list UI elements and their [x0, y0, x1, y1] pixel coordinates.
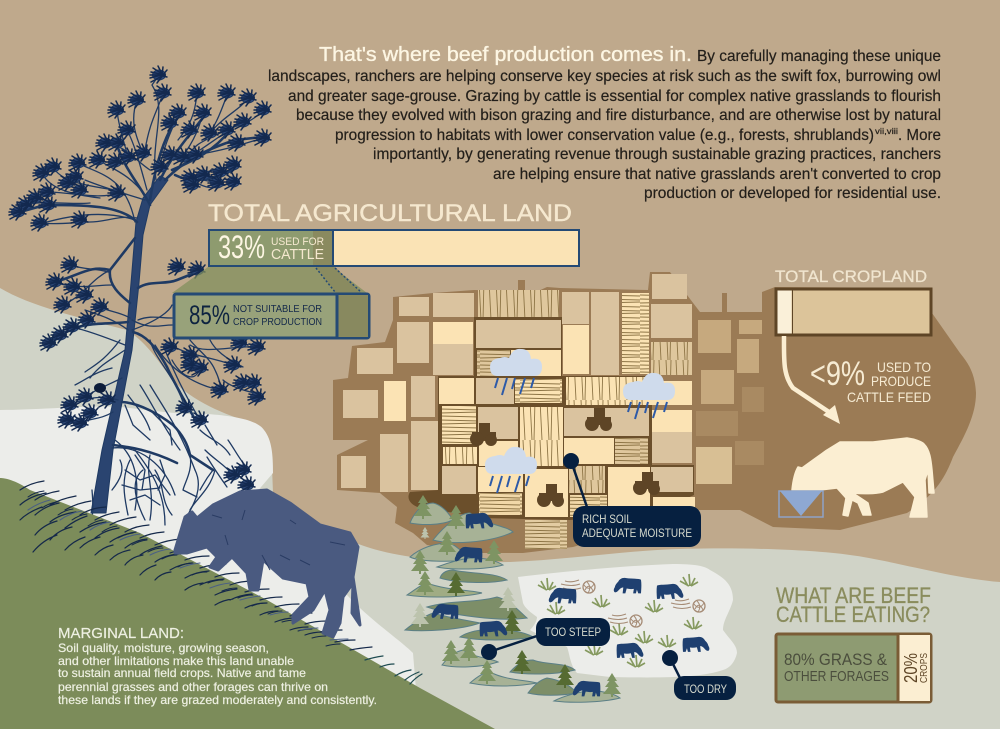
callout: too dry: TOO DRY [684, 682, 727, 696]
bar chart: not suitable for crop production: NOT SUITABLE FOR [233, 304, 322, 315]
icon: cream cow eating [792, 438, 934, 517]
bar chart: not suitable for crop production: 85% [189, 300, 230, 330]
arrow: cropland to cattle feed [784, 336, 840, 424]
bar chart: total cropland [776, 289, 931, 335]
bar chart: cattle diet: 20% [901, 653, 921, 683]
bar chart: cattle diet: OTHER FORAGES [784, 668, 889, 685]
text block: marginal land: these lands if they are grazed moderately and consistently. [58, 693, 377, 707]
text block: marginal land [58, 625, 377, 707]
bar chart: not suitable for crop production: CROP PRODUCTION [233, 317, 322, 328]
heading paragraph: beef production: importantly, by generating revenue through sustainable grazing practices, ranchers [373, 146, 941, 163]
pine tree illustration [9, 66, 271, 530]
chart heading: total agricultural land: TOTAL AGRICULTURAL LAND [208, 200, 572, 227]
stat: under nine percent cattle feed: CATTLE FEED [847, 389, 931, 405]
icons: grass and tumbleweeds [538, 574, 705, 667]
bar chart: total agricultural land: CATTLE [271, 246, 324, 263]
white snow ground [0, 407, 416, 700]
soil shadow [408, 317, 694, 520]
callout: too steep [481, 618, 610, 660]
text block: marginal land: Soil quality, moisture, growing season, [58, 641, 269, 655]
stat: under nine percent cattle feed [810, 355, 931, 405]
icons: tractors [470, 408, 660, 507]
heading paragraph: beef production: are helping ensure that native grasslands aren't converted to crop [493, 166, 941, 183]
stat: under nine percent cattle feed: <9% [810, 355, 865, 393]
heading paragraph: beef production: That's where beef production comes in. [319, 44, 692, 66]
grass strokes on slope [20, 481, 422, 684]
pine trees [411, 495, 621, 697]
bar chart: not suitable for crop production [174, 294, 369, 338]
heading: what are beef cattle eating: WHAT ARE BEEF [776, 583, 931, 608]
bar chart: cattle diet: 80% GRASS & [784, 650, 888, 669]
hatched fields [442, 290, 692, 549]
callout: rich soil: RICH SOIL [582, 512, 632, 526]
heading paragraph: beef production: production or developed for residential use. [644, 185, 941, 202]
panel: hills with trees [405, 503, 620, 702]
pine needle tufts [9, 66, 271, 493]
text block: marginal land: perennial grasses and other forages can thrive on [58, 680, 328, 694]
callout: rich soil [563, 453, 701, 547]
heading paragraph: beef production: landscapes, ranchers are helping conserve key species at risk such as the swift fox, burrowing owl [268, 68, 941, 85]
icon: feed trough [779, 491, 823, 517]
stat: under nine percent cattle feed: PRODUCE [871, 373, 931, 389]
callout: too steep: TOO STEEP [545, 625, 601, 639]
bar chart: total agricultural land [209, 229, 579, 266]
heading: what are beef cattle eating: CATTLE EATING? [776, 602, 930, 627]
heading paragraph: beef production: and greater sage-grouse. Grazing by cattle is essential for complex native grasslands to flourish [288, 88, 941, 105]
text block: marginal land: and other limitations make this land unable [58, 654, 294, 668]
heading paragraph: beef production: because they evolved with bison grazing and fire disturbance, and are otherwise lost by natural [296, 107, 941, 124]
heading paragraph: beef production: . More [898, 127, 941, 144]
bison [175, 490, 360, 637]
icons: rain clouds [485, 349, 675, 493]
grey hills ground [0, 288, 1000, 729]
connector: marginal share to crop unsuitability [172, 267, 367, 293]
heading paragraph: beef production: By carefully managing these unique [697, 48, 941, 65]
stat: under nine percent cattle feed: USED TO [877, 359, 931, 375]
text block: marginal land: to sustain annual field crops. Native and tame [58, 666, 306, 680]
bar chart: total agricultural land: USED FOR [271, 236, 324, 248]
dry pasture area [518, 564, 737, 677]
chart heading: total cropland: TOTAL CROPLAND [775, 267, 927, 286]
panel: crop fields [341, 274, 764, 549]
callout: rich soil: ADEQUATE MOISTURE [582, 526, 692, 540]
heading paragraph: beef production: vii,viii [875, 127, 898, 136]
green slope [0, 478, 495, 729]
text block: marginal land: MARGINAL LAND: [58, 625, 184, 642]
heading: what are beef cattle eating [776, 583, 931, 627]
bar chart: cattle diet [776, 634, 931, 702]
bar chart: cattle diet: CROPS [919, 653, 930, 683]
bar chart: total agricultural land: 33% [218, 229, 265, 265]
icons: grazing cattle [432, 513, 709, 696]
callout: too dry [662, 650, 736, 700]
heading paragraph: beef production: progression to habitats with lower conservation value (e.g., forests, shrublands) [335, 127, 874, 144]
brown cropland soil [333, 272, 976, 553]
heading paragraph: beef production [268, 44, 941, 202]
